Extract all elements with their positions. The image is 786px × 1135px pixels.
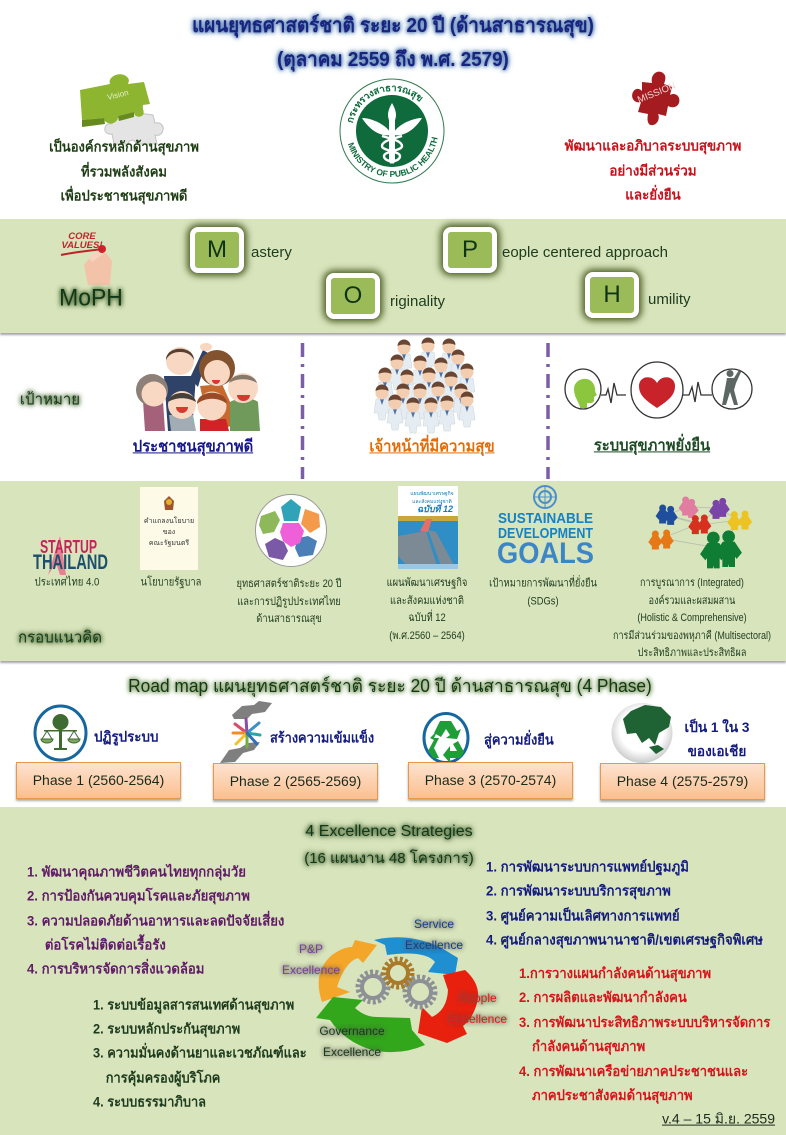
list: governance excellence: 1. ระบบข้อมูลสารสนเทศด้านสุขภาพ: [93, 996, 294, 1012]
logo: Startup Thailand: THAILAND: [33, 551, 108, 574]
panel: strategies: [0, 807, 786, 1135]
list: people excellence: ภาคประชาสังคมด้านสุขภาพ: [532, 1087, 693, 1103]
label: people excellence: Excellence: [449, 1012, 507, 1026]
image: government policy booklet: คณะรัฐมนตรี: [149, 540, 189, 547]
phase 2 box: Phase 2 (2565-2569): [230, 773, 361, 789]
label: [489, 575, 597, 607]
icon: doctors crowd: [374, 338, 476, 434]
icon: recycle: [422, 712, 470, 762]
image: national development plan book: [398, 486, 458, 569]
icon: scales tree: [34, 704, 88, 762]
title: [188, 10, 598, 76]
label: service excellence: [402, 916, 466, 953]
label: ประสิทธิภาพและประสิทธิผล: [638, 647, 746, 659]
label: governance excellence: [316, 1023, 386, 1060]
list: people excellence: 3. การพัฒนาประสิทธิภาพระบบบริหารจัดการ: [519, 1014, 770, 1030]
label: ฉบับที่ 12: [408, 612, 446, 624]
icon: core values hand: VALUES!: [62, 240, 102, 251]
core value: Mastery: [182, 218, 292, 282]
chart: five strategy pentagons: [255, 494, 327, 567]
vision text: เพื่อประชาชนสุขภาพดี: [61, 187, 187, 203]
vision text: [49, 138, 199, 204]
mission text: พัฒนาและอภิบาลระบบสุขภาพ: [565, 137, 741, 153]
panel: conceptual framework: [0, 481, 786, 661]
logo: sustainable development goals: GOALS: [497, 537, 594, 570]
mission text: และยั่งยืน: [625, 186, 681, 202]
label: ด้านสาธารณสุข: [256, 613, 322, 625]
list: P&P excellence: 2. การป้องกันควบคุมโรคและภัยสุขภาพ: [27, 888, 250, 904]
phase label: ปฏิรูประบบ: [94, 729, 158, 745]
label: governance excellence: Excellence: [323, 1045, 381, 1059]
phase 1 box: [16, 762, 181, 799]
core value: Originality: [318, 264, 445, 328]
label: [387, 577, 467, 642]
panel: core values: [0, 219, 786, 333]
icon: family illustration: [136, 343, 260, 431]
list: P&P excellence: ต่อโรคไม่ติดต่อเรื้อรัง: [45, 936, 166, 952]
image: national development plan book: ฉบับที่ 12: [417, 502, 453, 514]
divider: [300, 343, 304, 479]
image: national development plan book: แผนพัฒนาเศรษฐกิจ: [410, 490, 454, 497]
icon: stakeholder network: [648, 496, 752, 568]
list: governance excellence: 4. ระบบธรรมาภิบาล: [93, 1093, 206, 1109]
list: P&P excellence: 4. การบริหารจัดการสิ่งแวดล้อม: [27, 960, 204, 976]
label: governance excellence: Governance: [319, 1024, 385, 1038]
label: นโยบายรัฐบาล: [141, 576, 201, 588]
heading: 4 excellence strategies: [300, 820, 478, 870]
core value: People centered approach: P: [462, 236, 478, 263]
label: service excellence: Excellence: [405, 938, 463, 952]
icon: ministry logo: MINISTRY OF PUBLIC HEALTH: [348, 137, 438, 177]
list: people excellence: 2. การผลิตและพัฒนากำลังคน: [519, 989, 687, 1005]
icon: vision puzzle: Vision: [106, 88, 129, 102]
phase label: ของเอเชีย: [688, 743, 746, 759]
core value: Humility: H: [603, 281, 621, 308]
version note: v.4 – 15 มิ.ย. 2559: [662, 1111, 775, 1127]
list: people excellence: [519, 965, 770, 1104]
goal heading: เป้าหมาย: [20, 391, 80, 408]
icon: ministry logo: [340, 78, 444, 184]
heading: framework: กรอบแนวคิด: [18, 629, 102, 646]
phase 2 box: [213, 763, 378, 800]
label: P&P excellence: P&P: [299, 942, 323, 956]
vision text: เป็นองค์กรหลักด้านสุขภาพ: [49, 138, 199, 154]
logo: sustainable development goals: DEVELOPMENT: [498, 525, 593, 542]
label: และการปฏิรูปประเทศไทย: [237, 595, 341, 607]
list: P&P excellence: [27, 863, 284, 976]
core value: Originality: O: [344, 282, 362, 309]
label: การมีส่วนร่วมของพหุภาคี (Multisectoral): [613, 630, 771, 642]
goal label: happy staff: เจ้าหน้าที่มีความสุข: [369, 438, 495, 455]
label: องค์รวมและผสมผสาน: [649, 595, 735, 607]
image: government policy booklet: ของ: [163, 529, 175, 536]
core value: People centered approach: [434, 218, 668, 282]
phase label: สู่ความยั่งยืน: [484, 732, 554, 748]
goal label: sustainable system: ระบบสุขภาพยั่งยืน: [594, 437, 710, 454]
phase 3 box: [408, 762, 573, 799]
list: P&P excellence: 1. พัฒนาคุณภาพชีวิตคนไทยทุกกลุ่มวัย: [27, 863, 246, 879]
list: governance excellence: 2. ระบบหลักประกันสุขภาพ: [93, 1021, 240, 1037]
divider: [546, 343, 550, 479]
heading: MoPH: MoPH: [59, 285, 123, 312]
list: governance excellence: 3. ความมั่นคงด้านยาและเวชภัณฑ์และ: [93, 1045, 307, 1061]
image: national development plan book: และสังคมแห่งชาติ: [412, 498, 452, 505]
core value: Humility: umility: [648, 291, 691, 308]
icon: vision puzzle: [80, 74, 164, 144]
title: (ตุลาคม 2559 ถึง พ.ศ. 2579): [277, 49, 509, 71]
label: ยุทธศาสตร์ชาติระยะ 20 ปี: [236, 578, 342, 590]
label: people excellence: [446, 990, 510, 1027]
list: service excellence: 2. การพัฒนาระบบบริการสุขภาพ: [486, 883, 671, 899]
core value: Mastery: M: [207, 236, 227, 263]
mission text: [564, 137, 741, 202]
phase label: สร้างความเข้มแข็ง: [270, 730, 374, 746]
logo: sustainable development goals: SUSTAINABLE: [498, 510, 593, 527]
heading: road map: Road map แผนยุทธศาสตร์ชาติ ระยะ 20 ปี ด้านสาธารณสุข (4 Phase): [128, 676, 652, 696]
phase 4 box: [600, 763, 765, 800]
icon: globe Asia: [612, 703, 672, 763]
label: [236, 578, 342, 625]
logo: sustainable development goals: [497, 485, 594, 570]
list: people excellence: 1.การวางแผนกำลังคนด้านสุขภาพ: [519, 965, 711, 981]
logo: Startup Thailand: STARTUP: [40, 537, 97, 557]
core value: Mastery: astery: [251, 244, 292, 261]
phase 3 box: Phase 3 (2570-2574): [425, 772, 556, 788]
label: (SDGs): [527, 595, 559, 607]
label: service excellence: Service: [414, 917, 454, 931]
image: government policy booklet: คำแถลงนโยบาย: [144, 518, 194, 525]
label: แผนพัฒนาเศรษฐกิจ: [387, 577, 467, 589]
label: การบูรณาการ (Integrated): [640, 577, 744, 589]
icon: core values hand: CORE: [68, 231, 96, 242]
list: service excellence: [486, 858, 763, 949]
goal label: healthy people: ประชาชนสุขภาพดี: [133, 438, 253, 455]
label: เป้าหมายการพัฒนาที่ยั่งยืน: [489, 578, 597, 590]
label: P&P excellence: Excellence: [282, 963, 340, 977]
logo: Startup Thailand: [33, 536, 108, 575]
image: government policy booklet: [140, 487, 198, 570]
icon: mission puzzle: MISSION: [636, 81, 677, 106]
label: P&P excellence: [279, 941, 342, 978]
list: service excellence: 3. ศูนย์ความเป็นเลิศทางการแพทย์: [486, 907, 680, 923]
list: P&P excellence: 3. ความปลอดภัยด้านอาหารและลดปัจจัยเสี่ยง: [27, 912, 284, 928]
label: [613, 577, 771, 659]
list: people excellence: กำลังคนด้านสุขภาพ: [532, 1038, 645, 1054]
phase 1 box: Phase 1 (2560-2564): [33, 772, 164, 788]
list: service excellence: 4. ศูนย์กลางสุขภาพนานาชาติ/เขตเศรษฐกิจพิเศษ: [486, 931, 763, 947]
icon: core values hand: [60, 231, 112, 285]
label: ประเทศไทย 4.0: [35, 576, 99, 588]
icon: strengthen hands: [220, 701, 272, 763]
label: และสังคมแห่งชาติ: [390, 594, 464, 606]
list: governance excellence: [93, 996, 307, 1109]
heading: 4 excellence strategies: 4 Excellence Strategies: [305, 823, 473, 840]
label: (พ.ศ.2560 – 2564): [389, 630, 465, 642]
phase label: [685, 718, 749, 759]
icon: mission puzzle: [632, 72, 680, 126]
core value: Originality: riginality: [390, 293, 445, 310]
icon: ministry logo: กระทรวงสาธารณสุข: [348, 86, 423, 123]
list: governance excellence: การคุ้มครองผู้บริโภค: [106, 1069, 220, 1085]
title: แผนยุทธศาสตร์ชาติ ระยะ 20 ปี (ด้านสาธารณสุข): [192, 15, 594, 37]
icon: health system: [564, 361, 753, 419]
list: service excellence: 1. การพัฒนาระบบการแพทย์ปฐมภูมิ: [486, 858, 689, 874]
vision text: ที่รวมพลังสังคม: [81, 163, 167, 179]
list: people excellence: 4. การพัฒนาเครือข่ายภาคประชาชนและ: [519, 1062, 748, 1078]
heading: 4 excellence strategies: (16 แผนงาน 48 โครงการ): [304, 850, 474, 867]
label: (Holistic & Comprehensive): [637, 612, 747, 624]
phase 4 box: Phase 4 (2575-2579): [617, 773, 748, 789]
core value: People centered approach: eople centered approach: [502, 244, 668, 261]
mission text: อย่างมีส่วนร่วม: [609, 162, 697, 178]
core value: Humility: [576, 264, 691, 326]
phase label: เป็น 1 ใน 3: [685, 719, 749, 735]
label: people excellence: People: [459, 991, 497, 1005]
